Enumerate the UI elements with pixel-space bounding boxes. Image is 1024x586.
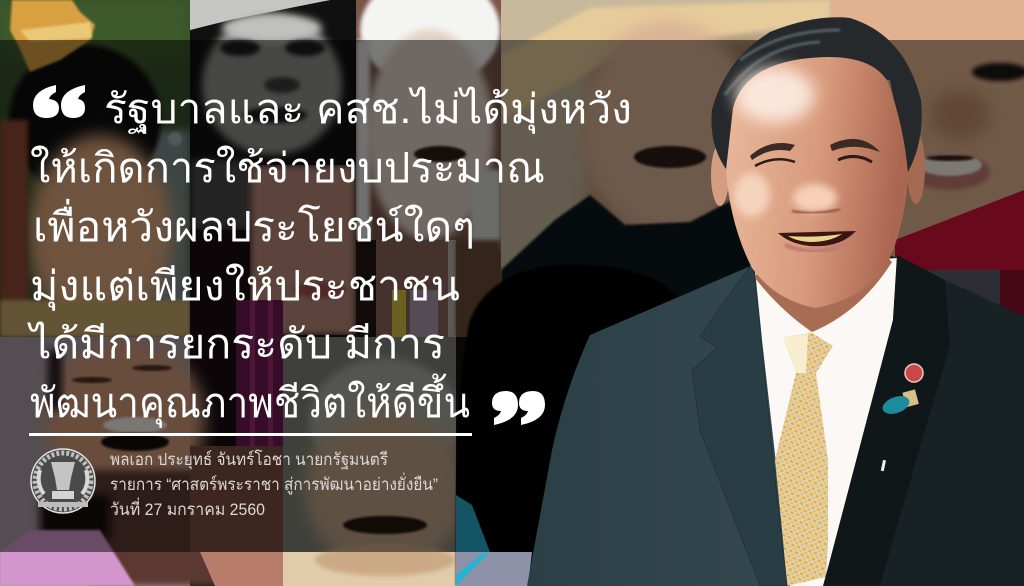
portrait of the prime minister (527, 17, 1024, 586)
lower right patterned strip behind the man (915, 270, 1024, 320)
eyes (755, 159, 795, 166)
neck (755, 240, 892, 332)
attribution text: พลเอก ประยุทธ์ จันทร์โอชา นายกรัฐมนตรี (110, 449, 388, 470)
nose (792, 184, 840, 213)
portrait tile: old woman lower centre (283, 337, 465, 586)
portrait tile: smiling child (831, 0, 1024, 270)
right lapel (823, 255, 950, 586)
attribution text: รายการ “ศาสตร์พระราชา สู่การพัฒนาอย่างยั่งยืน” (110, 472, 438, 495)
portrait tile: child behind text (250, 165, 356, 335)
lapel pin: red badge (905, 364, 923, 382)
attribution text (110, 449, 438, 519)
lower lip (785, 243, 848, 251)
portrait tile: old woman in hat, black and white (190, 0, 356, 230)
attribution text: วันที่ 27 มกราคม 2560 (110, 497, 265, 519)
portrait tile: dancer (0, 0, 190, 337)
ears (711, 144, 729, 206)
tie (775, 333, 833, 586)
quote text: ให้เกิดการใช้จ่ายงบประมาณ (30, 145, 545, 191)
cheek highlight (734, 173, 770, 217)
left lapel (692, 262, 787, 586)
portrait tile: woman in straw hat (501, 0, 831, 300)
portrait tile: old woman with white hair (356, 0, 501, 337)
closing quotation mark (492, 391, 545, 425)
quote text (27, 86, 632, 428)
eyebrows (750, 143, 795, 160)
jacket (527, 255, 1024, 586)
dark hair silhouette (456, 265, 680, 586)
shirt (755, 258, 897, 586)
lapel pin: turquoise ribbon (880, 389, 919, 417)
portrait tile: laughing woman lower left (0, 337, 283, 586)
quote text: รัฐบาลและ คสช.ไม่ได้มุ่งหวัง (104, 86, 632, 134)
forehead highlight (735, 67, 815, 123)
mouth (778, 231, 856, 246)
quote text: พัฒนาคุณภาพชีวิตให้ดีขึ้น (30, 373, 470, 428)
lapel pin: white mark (881, 460, 886, 471)
maroon curtain tile (190, 230, 283, 446)
opening quotation mark (33, 85, 85, 118)
quote text: เพื่อหวังผลประโยชน์ใดๆ (33, 199, 475, 250)
quote text: ได้มีการยกระดับ มีการ (27, 321, 445, 367)
head (711, 17, 925, 308)
government seal (31, 449, 95, 513)
quote text: มุ่งแต่เพียงให้ประชาชน (30, 263, 460, 311)
face (726, 57, 908, 308)
hair (711, 17, 922, 178)
